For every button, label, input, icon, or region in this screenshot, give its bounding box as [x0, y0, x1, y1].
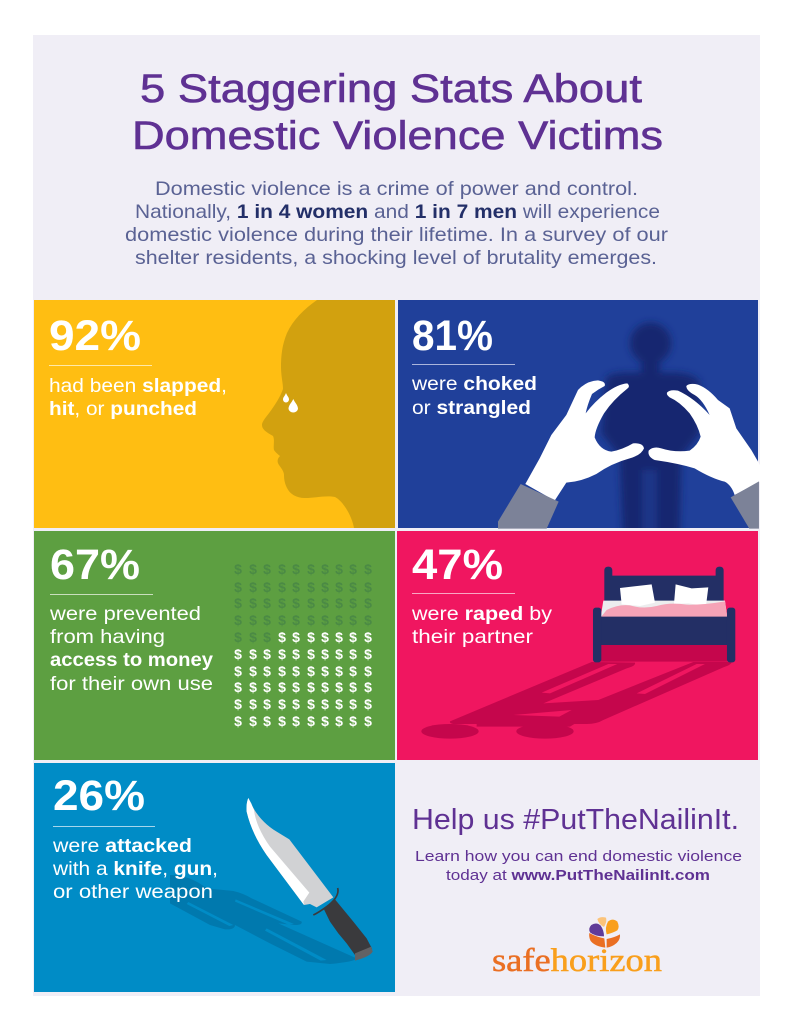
- logo wordmark: safehorizon: [492, 943, 662, 979]
- label: slapped: [49, 375, 227, 420]
- panel: 92% slapped: [34, 300, 395, 528]
- call to action: today at www.PutTheNailinIt.com: [446, 867, 710, 884]
- panel: 81% choked: [398, 300, 760, 540]
- logo mark: [589, 917, 620, 948]
- title: Domestic Violence Victims: [132, 114, 663, 158]
- call to action: [412, 804, 742, 884]
- label: choked: [411, 373, 537, 419]
- icon: dollar grid: $$$$$$$$$$: [234, 579, 372, 595]
- icon: dollar grid: $$$$$$$$$$: [234, 713, 372, 729]
- label: weapon: or other weapon: [53, 881, 213, 903]
- bed shadow: [421, 645, 732, 739]
- label: choked: were choked: [411, 373, 537, 395]
- panel: 47% raped: [397, 531, 758, 760]
- blade: [247, 798, 333, 907]
- title: 5 Staggering Stats About: [140, 67, 642, 111]
- label: money: for their own use: [50, 673, 213, 695]
- intro text: shelter residents, a shocking level of brutality emerges.: [135, 247, 657, 269]
- icon: dollar grid: $$$: [234, 629, 271, 645]
- stat: 67%: 67%: [50, 541, 140, 589]
- icon: bed: [421, 567, 735, 739]
- panel: 67% money: [34, 531, 395, 760]
- icon: crying face silhouette: [262, 300, 395, 528]
- icon: dollar grid: $$$$$$$: [278, 629, 372, 645]
- label: money: from having: [50, 626, 165, 648]
- stat: 47%: 47%: [412, 541, 503, 589]
- call to action: Learn how you can end domestic violence: [415, 848, 742, 865]
- handle: [324, 899, 372, 955]
- stat: 81%: 81%: [412, 312, 493, 360]
- intro text: [125, 178, 669, 269]
- icon: hands: [498, 380, 760, 529]
- label: money: were prevented: [49, 603, 201, 625]
- icon: knife: [170, 798, 373, 964]
- label: weapon: [52, 835, 218, 903]
- icon: tears: [283, 393, 298, 412]
- label: weapon: were attacked: [52, 835, 192, 857]
- icon: dollar grid: $$$$$$$$$$: [234, 696, 372, 712]
- label: raped: their partner: [412, 626, 534, 648]
- stat: 92%: 92%: [49, 312, 141, 360]
- icon: dollar grid: $$$$$$$$$$: [234, 595, 372, 611]
- stat: 26%: 26%: [53, 772, 145, 820]
- label: choked: or strangled: [412, 397, 531, 419]
- knife shadow: [170, 875, 357, 964]
- label: slapped: hit, or punched: [49, 398, 197, 420]
- panel: 26% weapon: [34, 763, 395, 992]
- intro text: domestic violence during their lifetime. In a survey of our: [125, 224, 669, 246]
- icon: dollar grid: $$$$$$$$$$: [234, 612, 372, 628]
- icon: dollar grid: $$$$$$$$$$: [234, 561, 372, 577]
- logo: safe horizon: [492, 917, 662, 979]
- intro text: Nationally, 1 in 4 women and 1 in 7 men will experience: [135, 201, 660, 223]
- label: raped: [411, 603, 552, 648]
- shadow gaps: [187, 899, 327, 961]
- intro text: Domestic violence is a crime of power and control.: [155, 178, 638, 200]
- label: money: [49, 603, 213, 695]
- icon: dollar grid: $$$$$$$$$$: [234, 663, 372, 679]
- icon: shadow figure: [601, 323, 700, 540]
- label: slapped: had been slapped ,: [49, 375, 227, 397]
- label: raped: were raped by: [411, 603, 552, 625]
- call to action: Help us #PutTheNailinIt.: [412, 804, 739, 836]
- icon: dollar grid: $$$$$$$$$$: [234, 679, 372, 695]
- title: [132, 67, 663, 158]
- icon: dollar grid: $$$$$$$$$$: [234, 646, 372, 662]
- label: money: access to money: [50, 649, 213, 671]
- label: weapon: with a knife, gun,: [52, 858, 218, 880]
- icon: dollar grid: [234, 561, 372, 729]
